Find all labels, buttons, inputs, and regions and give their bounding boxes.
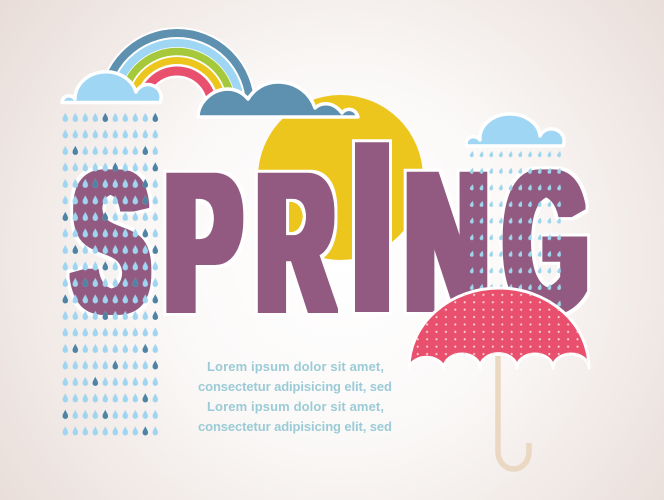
rain column, right [467, 146, 564, 312]
text block: lorem ipsum: consectetur adipisicing elit, sed [198, 379, 392, 394]
icon: sun [258, 95, 423, 260]
letter I: I [352, 93, 392, 362]
icon: light blue cloud, left [62, 72, 161, 102]
text block: lorem ipsum: Lorem ipsum dolor sit amet, [207, 359, 384, 374]
letter R: R [257, 131, 334, 353]
umbrella dots [409, 288, 589, 368]
dark rain drops [63, 113, 158, 435]
rain column, left [60, 109, 160, 439]
letter N: N [405, 131, 489, 353]
icon: umbrella [409, 288, 589, 469]
icon: dark blue cloud [198, 82, 358, 117]
icon: light blue cloud, right [466, 114, 564, 146]
text block: lorem ipsum [198, 359, 392, 434]
icon: rainbow [106, 27, 254, 98]
text block: lorem ipsum: consectetur adipisicing elit, sed [198, 419, 392, 434]
letter P: P [165, 133, 241, 354]
letter S: S [73, 130, 149, 354]
umbrella handle [498, 356, 529, 469]
text block: lorem ipsum: Lorem ipsum dolor sit amet, [207, 399, 384, 414]
title: SPRING letters [73, 93, 587, 362]
letter G: G [505, 130, 587, 353]
umbrella canopy [409, 288, 589, 368]
